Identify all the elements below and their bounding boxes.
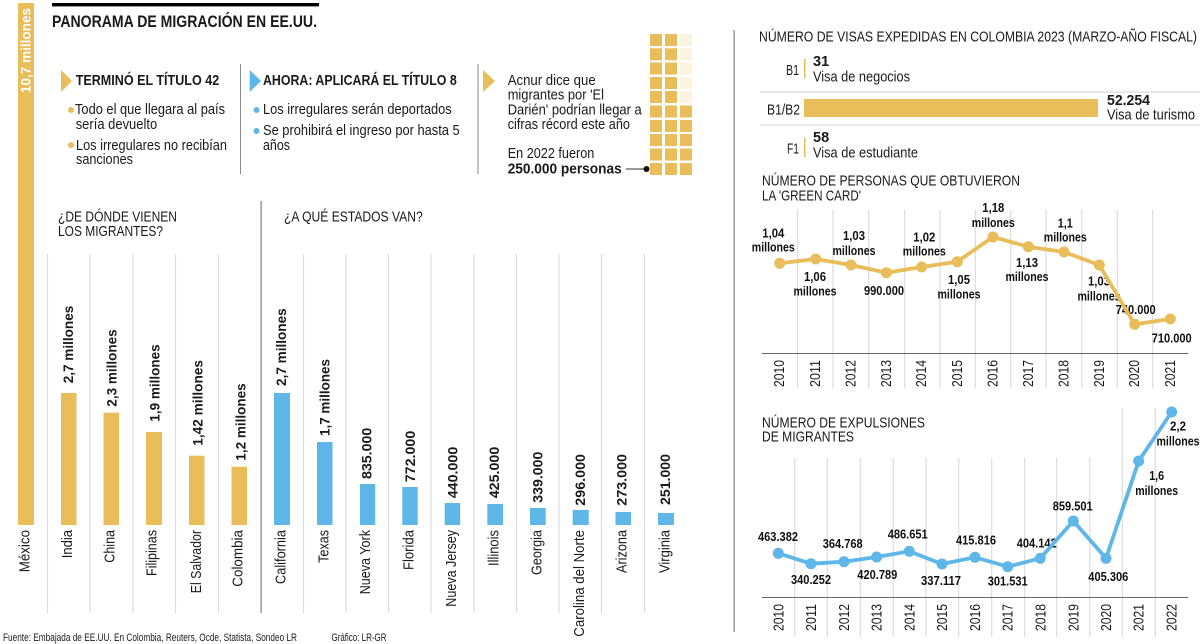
bar chart: estados de destino — [273, 308, 674, 637]
panel: ahora aplicará el título 8: Se prohibirá el ingreso por hasta 5 — [263, 123, 460, 139]
bar: Illinois: 425.000 — [486, 446, 502, 498]
bar: El Salvador — [188, 360, 205, 593]
title: panorama de migración: PANORAMA DE MIGRACIÓN EN EE.UU. — [52, 12, 317, 31]
icon grid: personas — [650, 34, 692, 175]
panel: acnur el darién: cifras récord este año — [508, 117, 630, 133]
panel: acnur el darién: Darién' podrían llegar a — [508, 102, 643, 118]
line chart: green card — [752, 200, 1192, 388]
panel: ahora aplicará el título 8: Los irregulares serán deportados — [263, 102, 452, 118]
bar: México: 10,7 millones — [18, 8, 34, 93]
visa row: B1/B2: 52.254 — [1107, 93, 1150, 109]
panel: terminó el título 42 — [61, 70, 227, 168]
bar: Texas: Texas — [315, 530, 332, 563]
data labels: green card: 1,06 — [804, 269, 826, 284]
axis years: green card: 2021 — [1163, 360, 1179, 387]
bar: Florida: Florida — [400, 529, 417, 570]
data labels: green card: 1,18 — [982, 200, 1004, 215]
bar: India: India — [59, 529, 76, 558]
axis years: green card: 2014 — [914, 360, 930, 387]
bar: Nueva Jersey — [443, 446, 460, 607]
bar: Nueva York: 835.000 — [359, 427, 375, 479]
panel: acnur el darién: migrantes por 'El — [508, 88, 604, 104]
bar: Virginia: 251.000 — [657, 454, 673, 505]
panel: terminó el título 42: sería devuelto — [76, 117, 157, 133]
data labels: green card: millones — [938, 287, 980, 302]
data labels: green card: 710.000 — [1152, 331, 1192, 346]
axis years: expulsiones: 2022 — [1165, 604, 1181, 631]
axis years: green card: 2020 — [1127, 360, 1143, 387]
data labels: expulsiones: 364.768 — [823, 536, 863, 551]
line: green card series — [774, 232, 1176, 330]
panel: ahora aplicará el título 8: años — [263, 138, 290, 154]
data labels: green card: 1,04 — [762, 225, 785, 240]
panel: acnur el darién: En 2022 fueron — [508, 146, 594, 162]
bar: Nueva Jersey: 440.000 — [444, 446, 460, 498]
heading: green card: NÚMERO DE PERSONAS QUE OBTUVIERON — [762, 173, 1020, 190]
axis years: expulsiones: 2016 — [968, 604, 984, 631]
bar: Nueva York: Nueva York — [357, 530, 374, 594]
data labels: expulsiones: 463.382 — [758, 529, 798, 544]
panel: terminó el título 42: Los irregulares no recibían — [76, 138, 227, 154]
data labels: expulsiones: millones — [1135, 483, 1178, 498]
bar: Illinois: Illinois — [485, 530, 502, 566]
panel: acnur el darién — [483, 70, 650, 177]
data labels: green card: 1,13 — [1016, 255, 1038, 270]
bar: Florida: 772.000 — [402, 430, 418, 482]
data labels: green card: millones — [1006, 269, 1048, 284]
axis years: expulsiones — [771, 604, 1181, 631]
bar: California — [273, 308, 290, 584]
bar: Georgia: 339.000 — [530, 451, 546, 503]
heading: a qué estados van: ¿A QUÉ ESTADOS VAN? — [284, 209, 423, 226]
panel: terminó el título 42: Todo el que llegara al país — [75, 102, 225, 118]
bar: Georgia: Georgia — [529, 529, 546, 575]
bar: Nueva Jersey: Nueva Jersey — [443, 530, 460, 607]
axis years: expulsiones: 2018 — [1033, 604, 1049, 631]
bar: Arizona — [614, 454, 631, 573]
visa row: B1/B2: B1/B2 — [767, 102, 800, 118]
heading: de dónde vienen — [58, 209, 177, 240]
bar: Carolina del Norte: Carolina del Norte — [571, 530, 588, 637]
axis years: expulsiones: 2010 — [771, 604, 787, 631]
bar: Carolina del Norte — [571, 454, 589, 637]
line chart: expulsiones — [758, 406, 1200, 637]
bar: Virginia: Virginia — [656, 529, 673, 573]
data labels: green card — [752, 200, 1192, 346]
axis years: expulsiones: 2020 — [1099, 604, 1115, 631]
bar: California: 2,7 millones — [273, 308, 289, 386]
axis years: green card — [772, 360, 1179, 387]
data labels: expulsiones: 405.306 — [1088, 569, 1128, 584]
bar: México — [16, 3, 34, 572]
heading: expulsiones: NÚMERO DE EXPULSIONES — [762, 415, 925, 432]
bar: India — [59, 306, 76, 558]
bar: Georgia — [529, 451, 546, 575]
axis years: green card: 2010 — [772, 360, 788, 387]
axis years: green card: 2016 — [986, 360, 1002, 387]
visa row: F1: 58 — [813, 130, 829, 146]
data labels: green card: 1,02 — [913, 230, 935, 245]
bar: Filipinas: 1,9 millones — [146, 344, 162, 422]
panel: terminó el título 42: sanciones — [76, 152, 133, 168]
panel: terminó el título 42: TERMINÓ EL TÍTULO 42 — [76, 71, 219, 89]
bar: China — [102, 329, 120, 563]
bar: Arizona: 273.000 — [614, 454, 630, 506]
heading: expulsiones — [762, 415, 925, 446]
visa row: F1 — [787, 130, 918, 162]
visa row: B1: Visa de negocios — [813, 70, 910, 86]
bar chart: origen de migrantes — [16, 3, 248, 593]
panel: ahora aplicará el título 8: AHORA: APLICARÁ EL TÍTULO 8 — [263, 72, 457, 89]
data labels: green card: 1,1 — [1058, 215, 1073, 230]
axis years: expulsiones: 2017 — [1001, 604, 1017, 631]
bar: Illinois — [485, 446, 503, 566]
bar: Virginia — [656, 454, 674, 573]
bar: El Salvador: 1,42 millones — [189, 360, 205, 446]
panel: acnur el darién: 250.000 personas — [508, 161, 622, 177]
bar: California: California — [273, 529, 290, 584]
heading: expulsiones: DE MIGRANTES — [762, 429, 854, 446]
axis years: expulsiones: 2021 — [1132, 604, 1148, 631]
axis years: expulsiones: 2013 — [870, 604, 886, 631]
bar: Filipinas — [144, 344, 162, 576]
data labels: green card: millones — [832, 243, 876, 258]
source note: Gráfico: LR-GR — [332, 632, 387, 644]
axis years: expulsiones: 2015 — [935, 604, 951, 631]
visa row: B1 — [786, 54, 910, 86]
visa row: F1: Visa de estudiante — [813, 146, 918, 162]
data labels: green card: millones — [972, 215, 1015, 230]
data labels: green card: millones — [1078, 289, 1120, 304]
data labels: expulsiones: 404.142 — [1017, 536, 1057, 551]
data labels: expulsiones: 486.651 — [888, 527, 928, 542]
panel: visas expedidas en Colombia — [759, 29, 1200, 162]
data labels: green card: 990.000 — [864, 283, 904, 298]
axis years: expulsiones: 2011 — [804, 604, 820, 631]
axis years: expulsiones: 2012 — [837, 604, 853, 631]
axis years: green card: 2011 — [808, 360, 824, 387]
bar: Filipinas: Filipinas — [144, 530, 161, 576]
data labels: expulsiones: 420.789 — [857, 567, 897, 582]
data labels: green card: millones — [794, 284, 836, 299]
data labels: expulsiones: 340.252 — [791, 572, 831, 587]
heading: green card — [762, 173, 1020, 205]
data labels: green card: millones — [1044, 230, 1087, 245]
line: expulsiones series — [773, 406, 1177, 572]
bar: Colombia: Colombia — [230, 529, 247, 587]
visa row: B1: 31 — [813, 54, 829, 70]
data labels: expulsiones: 301.531 — [988, 574, 1028, 589]
visa row: B1: B1 — [786, 63, 799, 79]
axis years: green card: 2012 — [844, 360, 860, 387]
bar: India: 2,7 millones — [60, 306, 76, 383]
data labels: expulsiones: 337.117 — [921, 573, 961, 588]
title: panorama de migración — [52, 3, 319, 31]
bar: Texas: 1,7 millones — [316, 359, 332, 436]
heading: de dónde vienen: LOS MIGRANTES? — [58, 224, 163, 240]
data labels: expulsiones — [758, 419, 1200, 589]
data labels: expulsiones: 415.816 — [956, 533, 996, 548]
visa row: F1: F1 — [787, 141, 799, 157]
data labels: green card: millones — [752, 240, 795, 255]
bar: Carolina del Norte: 296.000 — [572, 454, 588, 506]
source note: Fuente: Embajada de EE.UU. En Colombia, Reuters, Ocde, Statista, Sondeo LR — [3, 632, 297, 644]
visa row: B1/B2 — [767, 93, 1195, 123]
axis years: green card: 2017 — [1021, 360, 1037, 387]
axis years: green card: 2018 — [1056, 360, 1072, 387]
axis years: green card: 2015 — [950, 360, 966, 387]
bar: Nueva York — [357, 427, 375, 594]
data labels: green card: millones — [903, 244, 946, 259]
axis years: expulsiones: 2019 — [1066, 604, 1082, 631]
data labels: expulsiones: 2,2 — [1170, 419, 1186, 434]
heading: de dónde vienen: ¿DE DÓNDE VIENEN — [58, 209, 177, 226]
data labels: expulsiones: 859.501 — [1053, 498, 1093, 513]
bar: Florida — [400, 430, 418, 570]
bar: Texas — [315, 359, 332, 563]
axis years: expulsiones: 2014 — [902, 604, 918, 631]
data labels: green card: 740.000 — [1116, 302, 1156, 317]
bar: México: México — [16, 530, 33, 572]
bar: China: China — [102, 529, 119, 563]
data labels: green card: 1,03 — [1088, 274, 1110, 289]
bar: El Salvador: El Salvador — [188, 530, 205, 593]
bar: China: 2,3 millones — [104, 329, 120, 407]
axis years: green card: 2013 — [879, 360, 895, 387]
bar: Colombia: 1,2 millones — [232, 383, 248, 461]
data labels: expulsiones: 1,6 — [1149, 468, 1164, 483]
bar: Colombia — [230, 383, 248, 587]
axis years: green card: 2019 — [1092, 360, 1108, 387]
panel: acnur el darién: Acnur dice que — [508, 73, 596, 89]
bar: Arizona: Arizona — [614, 529, 631, 573]
panel: ahora aplicará el título 8 — [250, 70, 460, 154]
heading: green card: LA 'GREEN CARD' — [762, 188, 861, 205]
data labels: green card: 1,05 — [948, 272, 970, 287]
data labels: green card: 1,03 — [843, 228, 865, 243]
